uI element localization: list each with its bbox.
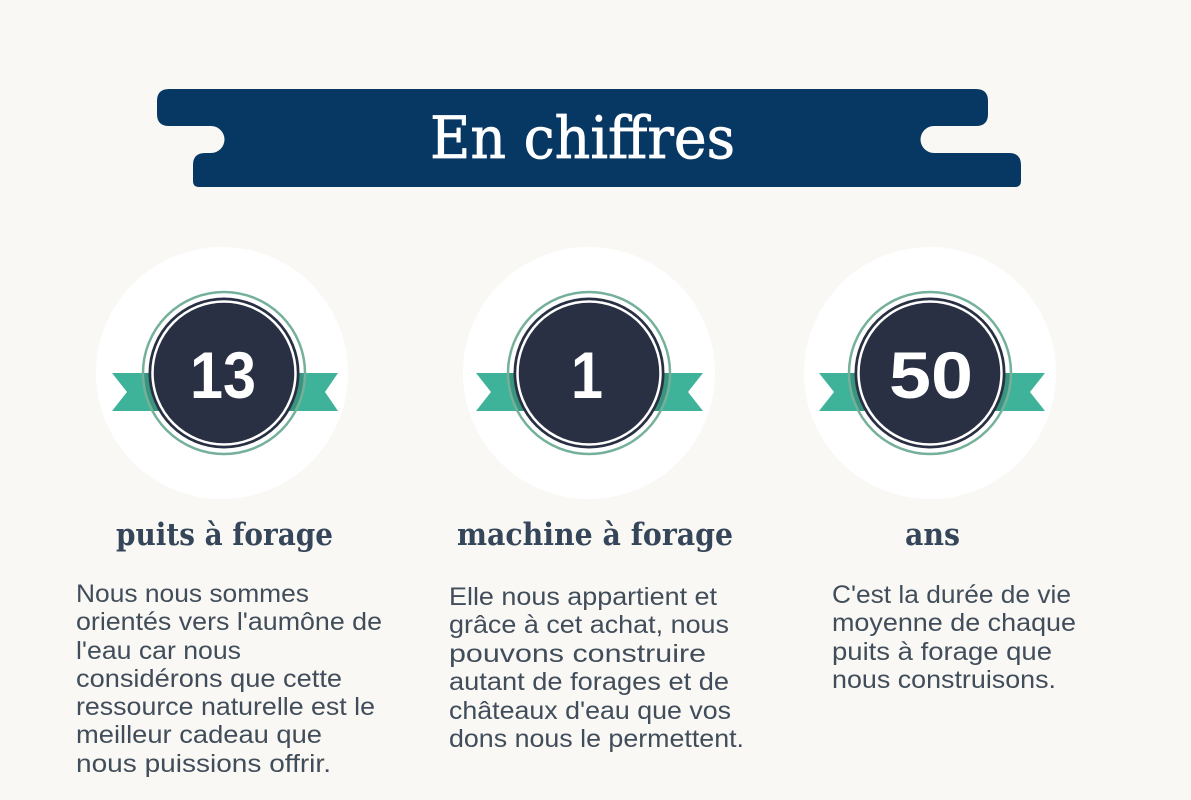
text block: machine à forage: autant de forages et de: [449, 668, 729, 696]
text block: puits à forage: nous puissions offrir.: [76, 750, 331, 778]
title: En chiffres: [430, 104, 735, 172]
badge: 1: [463, 247, 715, 499]
badge: 13: [96, 247, 348, 499]
text block: machine à forage: grâce à cet achat, nous: [449, 611, 729, 639]
text block: machine à forage: dons nous le permettent.: [449, 725, 744, 753]
text block: puits à forage: Nous nous sommes: [76, 580, 309, 608]
text block: puits à forage: l'eau car nous: [76, 637, 241, 665]
text block: machine à forage: Elle nous appartient et: [449, 583, 717, 611]
text block: ans: moyenne de chaque: [832, 609, 1076, 637]
title banner: [157, 89, 1021, 187]
text block: machine à forage: [449, 583, 744, 753]
text block: puits à forage: orientés vers l'aumône de: [76, 608, 382, 636]
badge: 50: [804, 247, 1056, 499]
text block: ans: puits à forage que: [832, 638, 1052, 666]
text block: puits à forage: ressource naturelle est le: [76, 693, 375, 721]
text block: ans: nous construisons.: [832, 666, 1056, 694]
number 1: 1: [571, 338, 603, 412]
text block: puits à forage: considérons que cette: [76, 665, 342, 693]
heading: ans: ans: [905, 517, 960, 553]
heading: puits à forage: puits à forage: [116, 517, 333, 553]
text block: puits à forage: [76, 580, 382, 778]
number 13: 13: [190, 338, 256, 412]
text block: machine à forage: pouvons construire: [449, 640, 706, 668]
text block: puits à forage: meilleur cadeau que: [76, 721, 322, 749]
text block: ans: C'est la durée de vie: [832, 581, 1071, 609]
number 50: 50: [889, 338, 973, 412]
heading: machine à forage: machine à forage: [457, 517, 733, 553]
text block: machine à forage: châteaux d'eau que vos: [449, 697, 731, 725]
text block: ans: [832, 581, 1076, 694]
